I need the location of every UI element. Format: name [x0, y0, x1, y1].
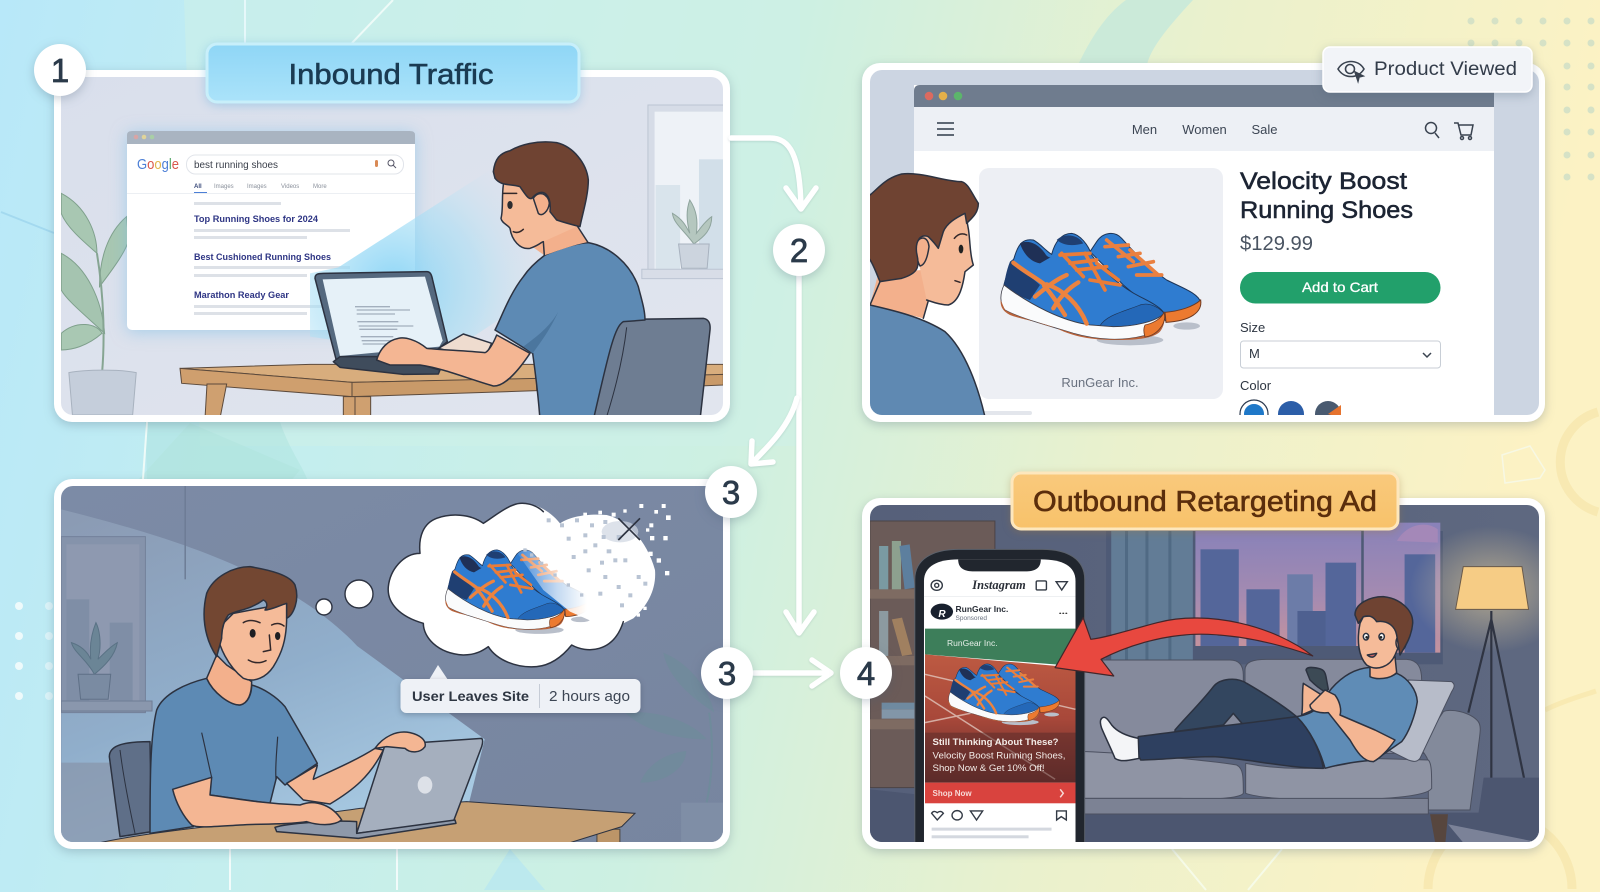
badge: product viewed: Product Viewed [1374, 59, 1517, 80]
sofa and reclining person [1060, 597, 1480, 814]
ad copy: Shop Now & Get 10% Off! [932, 763, 1044, 774]
running shoes [1001, 233, 1201, 345]
panel: inbound traffic search scene [54, 70, 730, 422]
product title: Running Shoes [1240, 197, 1413, 224]
size selector [1240, 320, 1440, 368]
nav links: Sale [1251, 122, 1278, 137]
ad copy: Still Thinking About These? [932, 737, 1059, 748]
smartphone [915, 549, 1085, 846]
step 4 number [840, 647, 892, 699]
panel: product page [862, 63, 1545, 428]
step 4 number: 4 [857, 655, 875, 692]
arrow: step 2 down to step 4 [786, 276, 814, 633]
result titles: Best Cushioned Running Shoes [194, 252, 331, 262]
product image card [979, 168, 1223, 399]
thought cloud with dissolving shoe [388, 503, 671, 667]
instagram header: Instagram [971, 578, 1026, 592]
badge: outbound retargeting ad: Outbound Retargeting Ad [1033, 486, 1377, 518]
step 1 number [34, 44, 86, 96]
search icon [1426, 122, 1439, 138]
ad brand line: RunGear Inc. [947, 638, 998, 648]
panel: outbound retargeting ad [862, 498, 1573, 849]
step 3 number top [705, 466, 757, 518]
badge: inbound traffic [207, 44, 579, 102]
badge: outbound retargeting ad [1012, 473, 1398, 529]
search bar [186, 155, 404, 174]
badge: product viewed [1323, 47, 1532, 92]
brand caption: RunGear Inc. [1061, 375, 1139, 390]
step 1 number: 1 [51, 52, 69, 89]
result bars [194, 202, 350, 315]
add to cart button [1240, 272, 1440, 304]
size selector: Size [1240, 320, 1265, 335]
store browser window [914, 85, 1494, 428]
red arrow from person to phone [1055, 618, 1313, 676]
person closing laptop [100, 567, 635, 843]
tooltip: user leaves site: 2 hours ago [549, 689, 630, 705]
arrow: panel 1 to step 2 [731, 138, 816, 209]
ad copy [932, 737, 1066, 774]
thought bubbles [316, 580, 373, 615]
color swatches: Color [1240, 378, 1272, 393]
ad copy: Velocity Boost Running Shoes, [932, 750, 1066, 762]
tabs: All [194, 184, 202, 190]
step 2 number [773, 224, 825, 276]
person viewing product [865, 174, 986, 420]
advertiser logo letter: R [938, 609, 946, 620]
step 3 number top: 3 [722, 474, 740, 511]
tabs [194, 184, 327, 190]
google logo: Google [137, 157, 179, 173]
nav links: Men [1132, 122, 1157, 137]
arrow: step 2 curving to step 3 [751, 398, 797, 464]
tabs: Videos [281, 184, 299, 190]
tooltip: user leaves site [400, 665, 640, 713]
product title [1240, 168, 1413, 224]
step 3 number lower [701, 647, 753, 699]
shop now button label: Shop Now [932, 789, 972, 798]
badge: inbound traffic: Inbound Traffic [288, 59, 494, 91]
search results browser [127, 131, 415, 330]
room with shelf, window and lamp [870, 521, 1573, 843]
icon: eye with cursor [1338, 62, 1364, 81]
person at laptop [180, 142, 723, 420]
product title: Velocity Boost [1240, 168, 1407, 195]
arrow: step 3 to step 4 [754, 660, 831, 686]
tabs: More [313, 184, 327, 190]
tabs: Images [214, 184, 234, 190]
step 2 number: 2 [790, 232, 808, 269]
result titles: Top Running Shoes for 2024 [194, 214, 318, 224]
tooltip: user leaves site: User Leaves Site [412, 688, 529, 704]
room background [61, 486, 724, 843]
add to cart button: Add to Cart [1302, 279, 1378, 295]
search results browser: best running shoes [194, 159, 278, 171]
result titles: Marathon Ready Gear [194, 290, 290, 300]
nav links: Women [1182, 122, 1227, 137]
illustration: window and plants [61, 105, 724, 415]
sponsor name: RunGear Inc. [956, 604, 1008, 614]
sponsored label: Sponsored [956, 615, 987, 622]
size selector: M [1249, 346, 1260, 361]
color swatches [1239, 380, 1341, 415]
hamburger menu [937, 123, 954, 135]
step 3 number lower: 3 [718, 655, 736, 692]
panel: user leaves site [54, 479, 730, 849]
result titles [194, 214, 331, 300]
nav links [1132, 124, 1277, 134]
price: $129.99 [1240, 233, 1313, 255]
tabs: Images [247, 184, 267, 190]
cart icon [1454, 123, 1473, 140]
